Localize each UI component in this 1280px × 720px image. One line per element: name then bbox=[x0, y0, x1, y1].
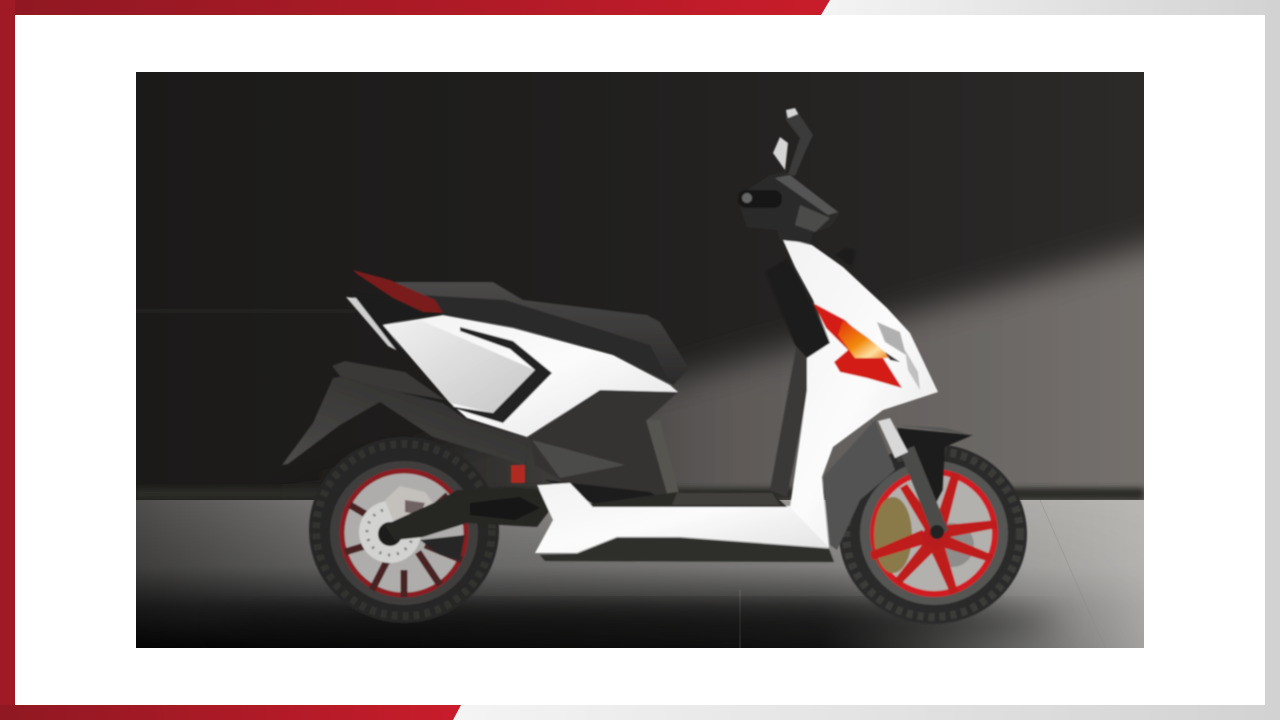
front white shield bbox=[765, 238, 938, 550]
swing arm and shock bbox=[385, 465, 550, 540]
handlebar and mirror bbox=[737, 108, 856, 268]
headlight accent bbox=[813, 303, 902, 388]
seat bbox=[393, 282, 689, 385]
mid dark panel bbox=[530, 388, 680, 498]
photo background: studio wall and floor bbox=[100, 72, 1200, 648]
rear fender bbox=[282, 373, 530, 465]
footboard bbox=[535, 483, 834, 562]
front wheel bbox=[839, 444, 1027, 624]
scooter bbox=[282, 108, 1027, 624]
tail light bbox=[353, 270, 443, 313]
rear white body panel bbox=[383, 315, 678, 437]
rear wheel bbox=[309, 437, 499, 623]
fork and fender bbox=[878, 418, 975, 540]
